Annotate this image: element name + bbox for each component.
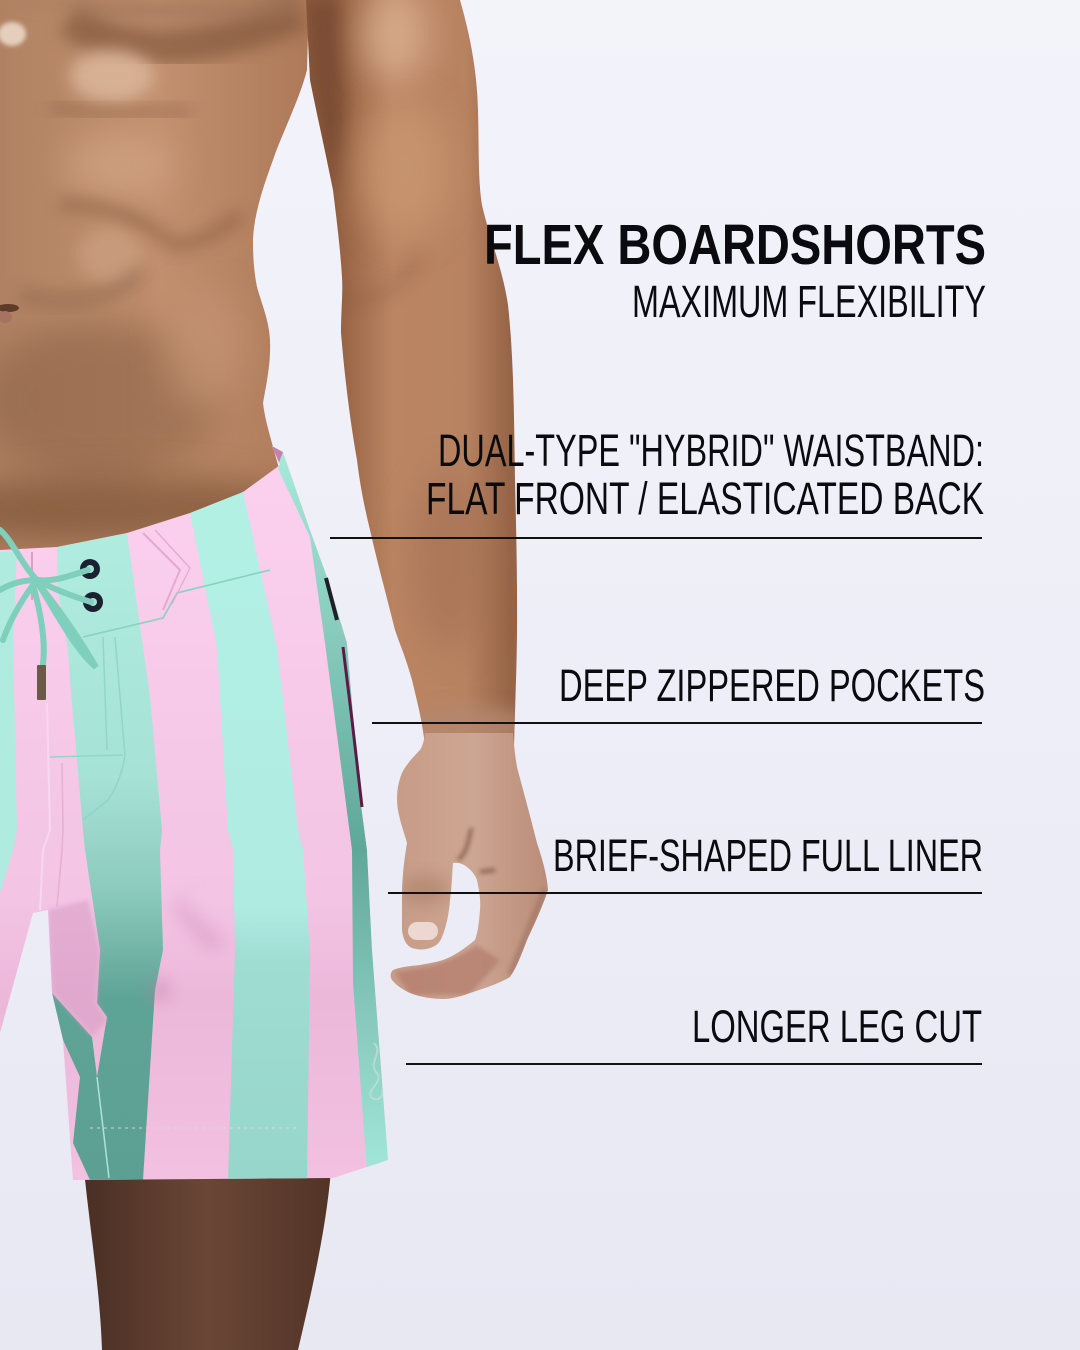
leg cut rule bbox=[406, 1063, 982, 1065]
drawstring bbox=[0, 530, 96, 667]
eyelets bbox=[80, 559, 103, 612]
torso bbox=[0, 0, 308, 550]
zipper tape bbox=[343, 647, 362, 807]
waistband rule bbox=[330, 537, 982, 539]
zipper pull bbox=[326, 578, 337, 620]
shorts stripes bbox=[0, 440, 400, 1190]
striped boardshorts bbox=[0, 440, 400, 1190]
arm bbox=[300, 0, 530, 750]
pockets rule bbox=[372, 722, 982, 724]
title: FLEX BOARDSHORTS bbox=[484, 213, 986, 277]
liner rule bbox=[388, 892, 982, 894]
feature: waistband bbox=[330, 425, 984, 539]
leg bbox=[84, 1170, 331, 1350]
model figure bbox=[0, 0, 555, 1350]
hand bbox=[390, 733, 548, 999]
leg logo bbox=[370, 1043, 382, 1099]
cord tag bbox=[37, 665, 46, 700]
pocket zipper bbox=[326, 578, 362, 807]
leg cut text: LONGER LEG CUT bbox=[692, 1001, 982, 1052]
